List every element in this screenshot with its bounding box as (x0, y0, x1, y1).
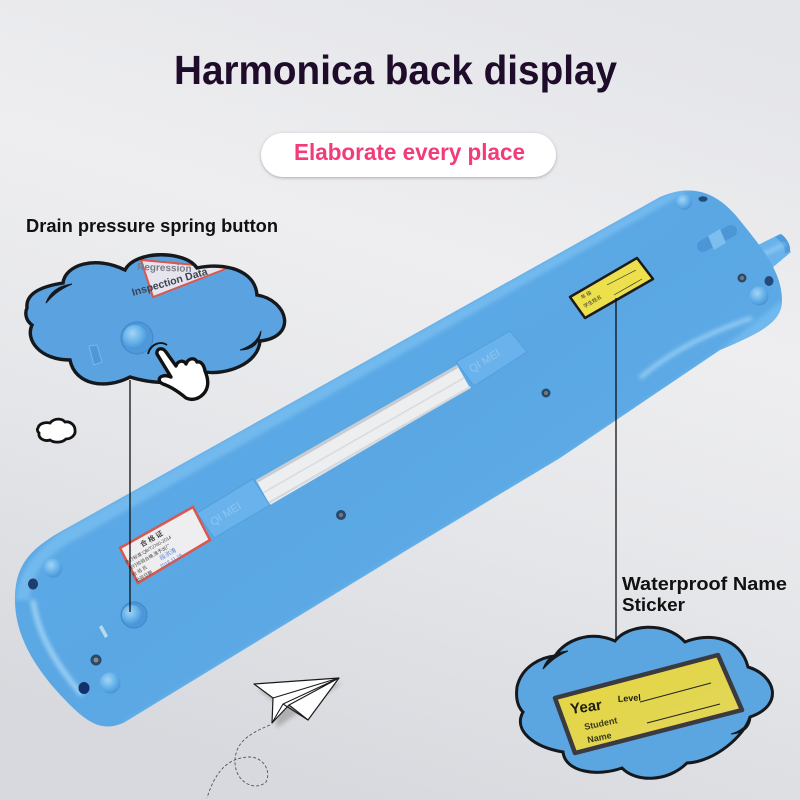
sticker close-up (555, 655, 742, 753)
icon: pointing hand (157, 349, 208, 399)
strap clip: left: QI MEI (208, 500, 244, 529)
harmonica body (15, 190, 790, 740)
quality certificate label: 执行标准:QB/T2740-2014 (124, 533, 173, 566)
quality certificate label: 2018.11.19 (159, 552, 184, 570)
yellow name label on body (570, 258, 653, 318)
knobs and screws (28, 194, 774, 694)
spring button on body (121, 602, 147, 628)
heading: name sticker: Waterproof Name (622, 574, 787, 594)
sticker close-up: Student (583, 715, 618, 732)
cloud callout: name sticker (517, 627, 772, 778)
slide groove (703, 229, 731, 250)
icon: small cloud (37, 419, 75, 442)
quality certificate label: 检验日期 (134, 569, 154, 584)
sticker close-up: Name (586, 730, 612, 745)
strap clip: left (197, 479, 270, 538)
icon: paper plane (254, 678, 344, 728)
inspection label fragment (131, 260, 228, 299)
leader line: spring button (129, 380, 131, 612)
inspection label fragment: Inspection Data (131, 266, 209, 299)
heading: drain button: Drain pressure spring button (26, 216, 278, 236)
subtitle pill: Elaborate every place (294, 139, 525, 165)
subtitle pill (261, 133, 556, 177)
button close-up (121, 322, 167, 354)
quality certificate label: 合 格 证 (138, 529, 164, 549)
quality certificate label: 进行检验合格,准予出厂 (127, 542, 172, 572)
mouthpiece (748, 234, 791, 268)
heading: name sticker line two: Sticker (622, 595, 685, 615)
title: Harmonica back display (174, 47, 617, 93)
quality certificate label (119, 507, 210, 584)
cloud callout: spring button (26, 255, 285, 399)
sticker close-up: Level (617, 692, 641, 704)
yellow name label on body: 年 级 (580, 289, 593, 301)
strap rail (256, 365, 471, 505)
leader line: name sticker (615, 298, 617, 642)
yellow name label on body: 学生姓名 (582, 294, 603, 310)
strap clip: right: QI MEI (467, 347, 503, 376)
sticker close-up: Year (569, 697, 603, 718)
inspection label fragment: Regression (137, 262, 192, 275)
strap clip: right (456, 331, 527, 386)
quality certificate label: 检 验 员 (131, 564, 149, 578)
dashed flight path (207, 725, 270, 798)
quality certificate label: 段洪涛 (158, 546, 178, 562)
